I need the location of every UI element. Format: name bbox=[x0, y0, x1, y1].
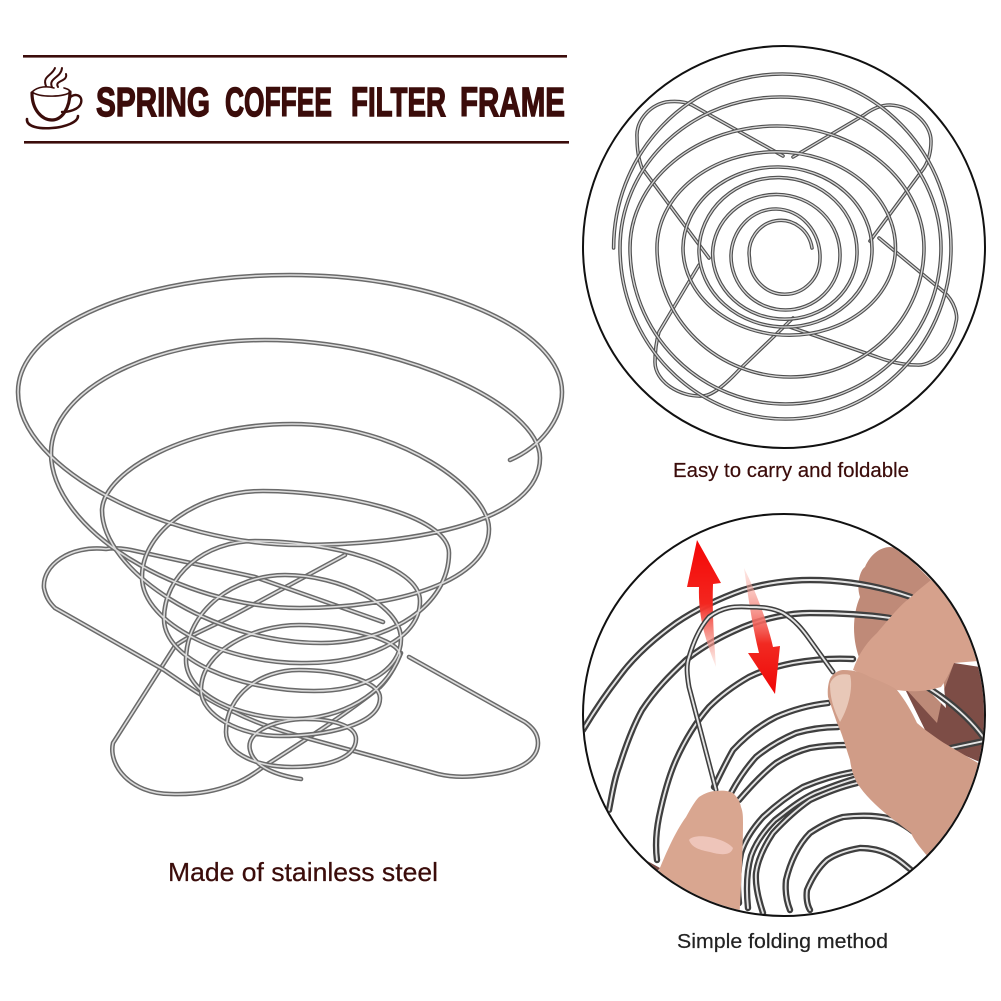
caption: made of stainless steel: Made of stainless steel bbox=[168, 857, 438, 887]
icon: red up arrow bbox=[687, 540, 721, 667]
product illustration: stainless steel wire cone filter bbox=[18, 275, 562, 794]
panel: folding method photo illustration bbox=[583, 514, 1000, 925]
icon: red down arrow bbox=[744, 568, 780, 694]
title text: FRAME bbox=[460, 79, 565, 125]
title text: COFFEE bbox=[225, 79, 332, 125]
folded wire spiral and feet bbox=[614, 74, 957, 419]
title text bbox=[96, 79, 565, 125]
hand: right hand with thumb and fingers bbox=[828, 580, 978, 855]
panel: folded filter top view bbox=[583, 46, 985, 448]
icon: steaming coffee cup bbox=[27, 68, 81, 128]
hand: left thumb bbox=[647, 790, 743, 910]
title text: SPRING bbox=[96, 79, 210, 125]
steel rings bbox=[583, 580, 984, 913]
pulled wire loop bbox=[687, 607, 833, 790]
title text: FILTER bbox=[351, 79, 446, 125]
title banner bbox=[23, 55, 569, 144]
caption: easy to carry and foldable: Easy to carry and foldable bbox=[673, 460, 909, 482]
back fingers bbox=[854, 547, 984, 762]
circle outline bbox=[583, 514, 985, 916]
caption: simple folding method: Simple folding method bbox=[677, 931, 888, 953]
